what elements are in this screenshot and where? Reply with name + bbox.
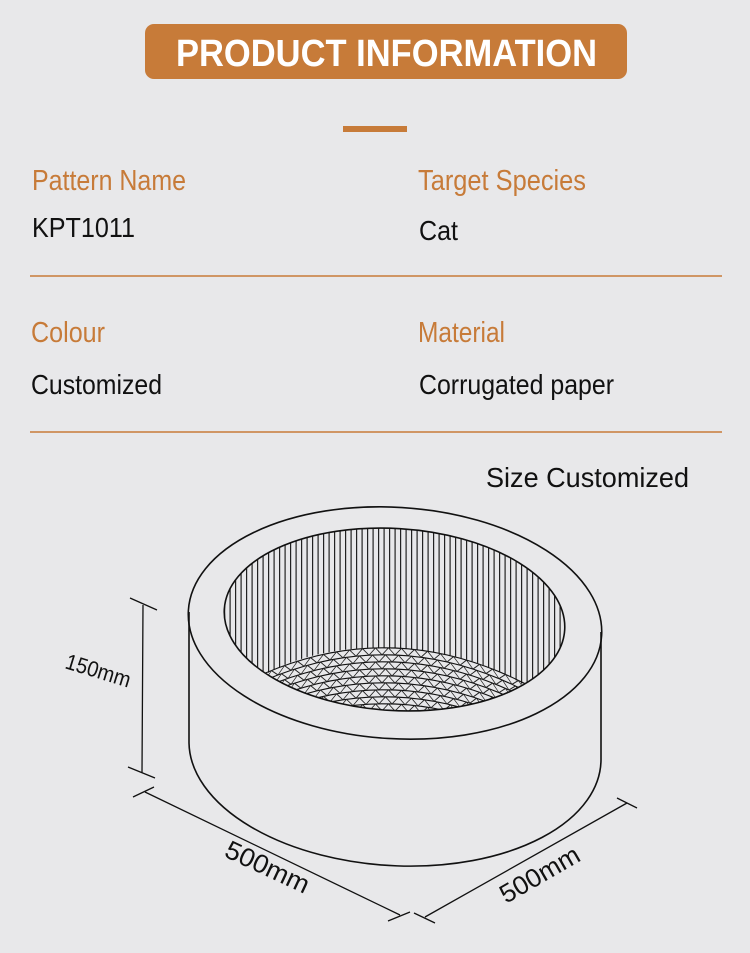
- dimension: depth 500mm: [414, 798, 637, 923]
- field: colour: Colour: [31, 317, 105, 349]
- product drawing: cat bed: [181, 495, 609, 866]
- dimension: width 500mm: 500mm: [220, 834, 315, 899]
- dimension: depth 500mm: 500mm: [494, 839, 585, 909]
- field: pattern name: KPT1011: [32, 212, 135, 243]
- floor triangle mesh: [266, 647, 525, 710]
- field: colour: [31, 317, 162, 400]
- field: target species: Cat: [419, 215, 458, 246]
- dimension: height 150mm: 150mm: [63, 649, 134, 692]
- field: colour: Customized: [31, 369, 162, 400]
- field: material: Material: [418, 317, 505, 349]
- dimension: height 150mm: [63, 598, 157, 778]
- inner wall corrugation: [225, 528, 561, 710]
- inner rim: [219, 518, 570, 721]
- title banner: PRODUCT INFORMATION: [176, 33, 597, 75]
- field: pattern name: Pattern Name: [32, 165, 186, 197]
- field: target species: [418, 165, 586, 246]
- field: material: Corrugated paper: [419, 369, 614, 400]
- outer wall: [189, 612, 601, 866]
- field: target species: Target Species: [418, 165, 586, 197]
- dimension: width 500mm: [133, 787, 410, 921]
- field: material: [418, 317, 614, 400]
- accent bar: [343, 126, 407, 132]
- size note: Size Customized: [486, 462, 689, 493]
- field: pattern name: [32, 165, 186, 243]
- outer rim: [181, 495, 609, 751]
